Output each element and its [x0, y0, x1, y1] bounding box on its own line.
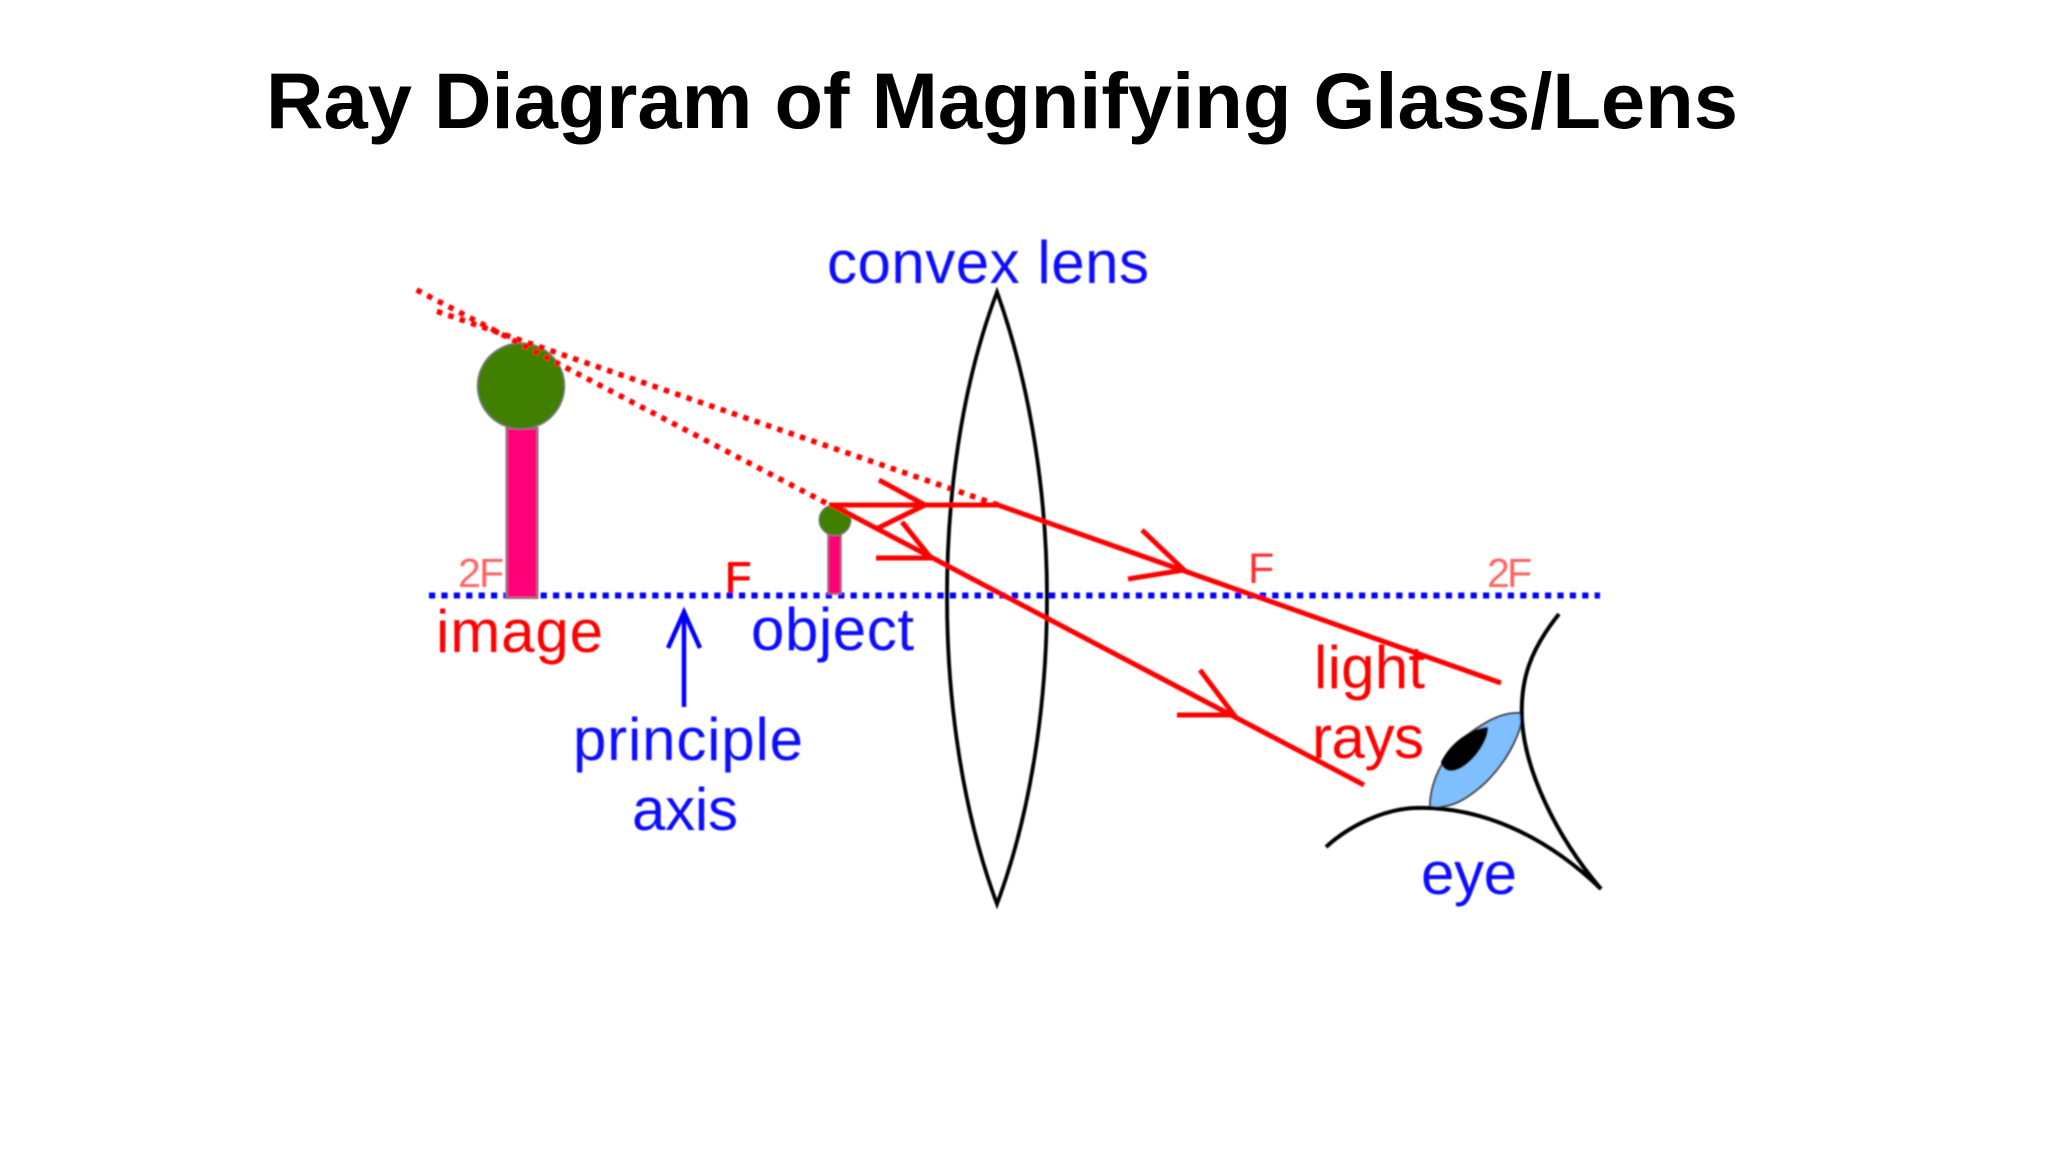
arrow: principle axis pointer	[668, 612, 700, 707]
label: eye: eye	[1421, 840, 1517, 907]
convex lens	[947, 292, 1047, 904]
label: right F: F	[1248, 545, 1274, 593]
lower light ray with arrows	[832, 505, 1364, 785]
label: right 2F: 2F	[1487, 550, 1532, 596]
label: left F: F	[725, 554, 751, 602]
upper light ray with arrows	[829, 480, 1501, 683]
label: object: object	[751, 596, 914, 663]
title: Ray Diagram of Magnifying Glass/Lens	[266, 56, 1738, 145]
label: left 2F: 2F	[458, 550, 504, 596]
label: image: image	[436, 598, 603, 665]
label: light rays: rays	[1312, 704, 1424, 771]
label: principle axis: principle	[573, 706, 803, 773]
label: principle axis: axis	[632, 776, 738, 843]
principal axis dotted line	[429, 592, 1600, 598]
object: small tree	[819, 504, 851, 594]
ray diagram	[411, 229, 1601, 907]
label: principle axis	[573, 706, 803, 843]
label: convex lens: convex lens	[827, 229, 1149, 296]
image: large tree	[478, 343, 564, 598]
label: light rays	[1312, 634, 1425, 771]
eye	[1326, 614, 1601, 889]
label: light rays: light	[1314, 634, 1425, 701]
virtual rays (dotted)	[411, 287, 998, 505]
